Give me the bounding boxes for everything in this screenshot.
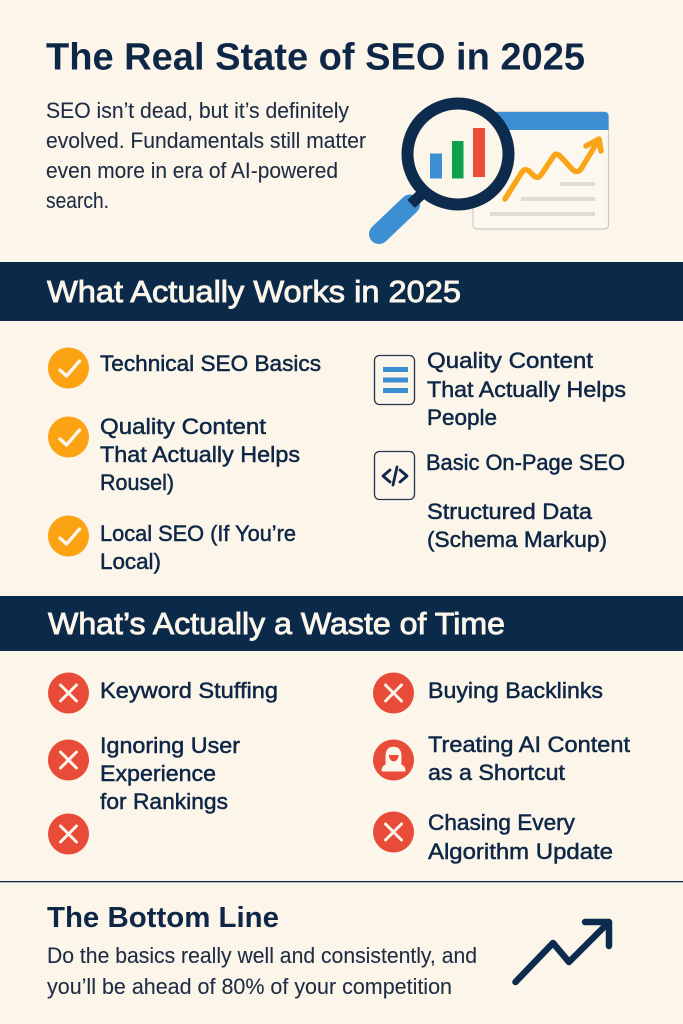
item: ignoring user experience: for Rankings [100,789,228,814]
item: technical seo basics: Technical SEO Basics [100,351,321,376]
lens bar chart [430,128,485,178]
title: The Real State of SEO in 2025 [46,36,585,78]
item: local seo [100,521,296,574]
item: keyword stuffing: Keyword Stuffing [100,678,278,703]
panel: waste of time items [48,672,631,864]
item: basic on-page seo: Basic On-Page SEO [426,450,625,475]
icon: cross [48,740,89,780]
icon: cross [373,812,414,852]
item: structured data [427,499,607,552]
item: structured data: (Schema Markup) [427,527,607,552]
intro text: evolved. Fundamentals still matter [46,128,366,153]
intro text: SEO isn’t dead, but it’s definitely [46,98,350,123]
section header: what works [0,262,683,321]
magnifying glass handle [379,204,410,234]
intro text [46,98,366,213]
item: chasing every update: Chasing Every [428,810,576,835]
bottom line text: Do the basics really well and consistently, and [47,943,477,968]
icon: ai shortcut [373,740,414,780]
intro text: even more in era of AI-powered [46,158,338,183]
item: quality content right: That Actually Helps [427,377,626,402]
item: ignoring user experience: Experience [100,761,216,786]
item: chasing every update: Algorithm Update [428,839,613,864]
browser window [473,112,608,229]
section header: waste of time: What’s Actually a Waste of Time [48,606,505,641]
icon: check [48,348,89,388]
item: treating ai content: Treating AI Content [428,732,631,757]
icon: cross [48,814,89,854]
item: ignoring user experience [100,733,241,814]
item: quality content left: Rousel) [100,470,174,495]
magnifying glass lens [408,104,508,204]
item: quality content left: That Actually Helps [100,442,300,467]
item: chasing every update [428,810,613,864]
item: buying backlinks: Buying Backlinks [428,678,603,703]
icon: check [48,516,89,556]
item: quality content left [100,414,300,495]
item: local seo: Local SEO (If You’re [100,521,296,546]
icon: trend arrow [516,922,609,982]
icon: code [374,452,414,500]
item: quality content right: People [427,405,497,430]
item: treating ai content: as a Shortcut [428,760,566,785]
item: quality content right [427,348,626,430]
icon: check [48,416,89,458]
item: structured data: Structured Data [427,499,593,524]
item: quality content left: Quality Content [100,414,267,439]
bottom line text [47,943,477,999]
section header: waste of time [0,596,683,651]
panel: what works items [48,348,626,574]
item: quality content right: Quality Content [427,348,594,373]
item: local seo: Local) [100,549,161,574]
bottom line heading: The Bottom Line [47,902,279,934]
illustration: magnifying glass over analytics window [379,104,608,234]
panel: bottom line [47,902,609,999]
item: ignoring user experience: Ignoring User [100,733,241,758]
section header: what works: What Actually Works in 2025 [47,274,461,309]
bottom line text: you’ll be ahead of 80% of your competition [47,974,452,999]
intro text: search. [46,188,109,213]
icon: content lines [374,356,414,404]
item: treating ai content [428,732,631,785]
icon: cross [373,672,414,714]
icon: cross [48,672,89,714]
